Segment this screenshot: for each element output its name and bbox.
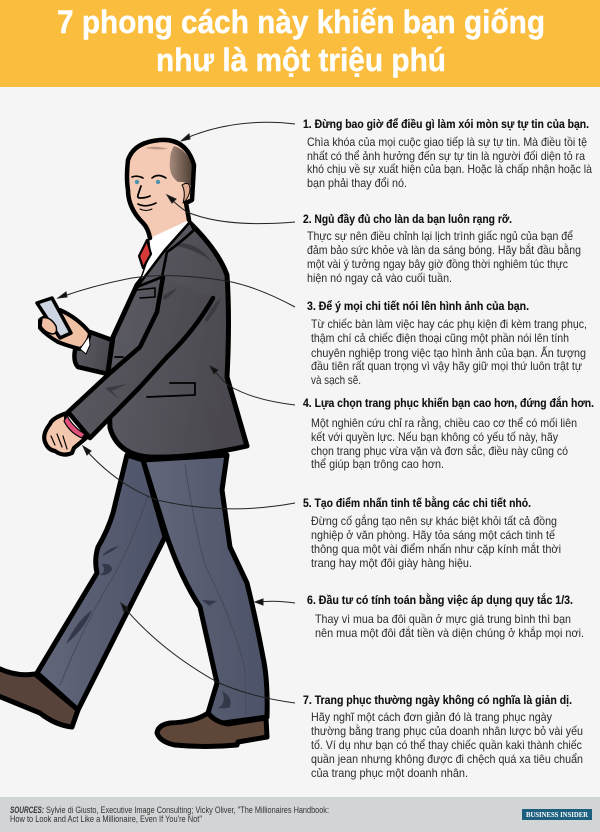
tip 5: nghiệp ở văn phòng. Hãy tỏa sáng một cách tinh tế [311, 528, 555, 542]
tip 6: 6. Đầu tư có tính toán bằng việc áp dụng quy tắc 1/3. [307, 592, 573, 607]
face [132, 176, 166, 210]
shirt collar [138, 217, 190, 287]
arrow 7 [121, 603, 295, 703]
tip 2: 2. Ngủ đầy đủ cho làn da bạn luôn rạng rỡ. [303, 212, 512, 226]
illustration: walking businessman [0, 140, 267, 747]
tip 6 [307, 592, 584, 640]
arrow 6 [255, 599, 295, 605]
tip 7 [303, 693, 583, 780]
logo: Business Insider: BUSINESS INSIDER [526, 810, 589, 819]
ear [182, 183, 190, 203]
tip 6: Thay vì mua ba đôi quần ở mực giá trung bình thì bạn [315, 612, 571, 626]
title: 7 phong cách này khiến bạn giống [57, 4, 545, 40]
tip 5: thông qua một vài điểm nhấn như cặp kính mắt thời [311, 541, 561, 556]
tip 2: một vài ý tưởng ngay bây giờ đồng thời nghiêm túc thực [307, 257, 568, 271]
tip 5: Đừng cố gắng tạo nên sự khác biệt khỏi tất cả đồng [311, 513, 557, 528]
tip 4 [303, 395, 594, 471]
arrow 3 [58, 276, 295, 307]
tip 7: Hãy nghĩ một cách đơn giản đó là trang phục ngày [311, 710, 552, 724]
footer bar [0, 797, 600, 832]
tip 5: 5. Tạo điểm nhấn tinh tế bằng các chi tiết nhỏ. [303, 495, 531, 510]
fingers [41, 318, 56, 334]
trouser creases [60, 465, 246, 715]
sources: How to Look and Act Like a Millionaire, Even If You're Not" [10, 814, 202, 824]
back shoe [0, 667, 78, 727]
arrow 1 [181, 122, 295, 141]
far sleeve [74, 332, 112, 374]
tie [139, 240, 151, 268]
tip 7: của trang phục một doanh nhân. [311, 766, 468, 780]
sources: Sylvie di Giusto, Executive Image Consulting; Vicky Oliver, "The Millionaires Handbook: [46, 805, 329, 815]
tip 5 [303, 495, 561, 570]
jacket cuff: pink shirt [64, 416, 85, 438]
tip 4: thể giúp bạn trông cao hơn. [311, 457, 444, 471]
title banner [0, 0, 600, 87]
tip 3: 3. Để ý mọi chi tiết nói lên hình ảnh của bạn. [307, 299, 529, 313]
tip 3: thậm chí cả chiếc điện thoại cũng một phần nói lên tính [311, 331, 569, 345]
tip 3 [307, 299, 587, 387]
tip 3: và sạch sẽ. [311, 373, 361, 387]
tip 1 [303, 117, 592, 190]
jacket details [115, 288, 195, 397]
tip 4: chọn trang phục vừa vặn và đơn sắc, điều này cũng có [311, 443, 568, 458]
title [57, 4, 545, 78]
back leg [37, 455, 165, 710]
lapel [137, 222, 194, 287]
title: như là một triệu phú [156, 42, 446, 78]
tip 2 [303, 212, 581, 285]
tip 2: hiện nó ngay cả vào cuối tuần. [307, 271, 452, 285]
arrow 2 [167, 195, 295, 224]
shirt cuff [80, 336, 90, 354]
tip 5: trang hay một đôi giày hàng hiệu. [311, 556, 472, 570]
near arm [68, 277, 213, 438]
fist [44, 413, 86, 455]
tip 1: bạn phải thay đổi nó. [307, 176, 407, 190]
phone hand [40, 310, 90, 349]
sources [10, 805, 329, 824]
arrow 5 [83, 446, 295, 509]
hair [170, 146, 193, 186]
front leg [143, 455, 267, 723]
front shoe [157, 713, 267, 746]
sources: SOURCES: [10, 805, 44, 815]
knuckle lines [51, 434, 67, 449]
head outline [127, 140, 194, 238]
arrow 4 [210, 366, 295, 405]
phone [37, 298, 71, 338]
head [127, 140, 194, 238]
tip 4: kết với quyền lực. Nếu bạn không có yếu tố này, hãy [311, 430, 558, 444]
jacket body [108, 221, 247, 457]
